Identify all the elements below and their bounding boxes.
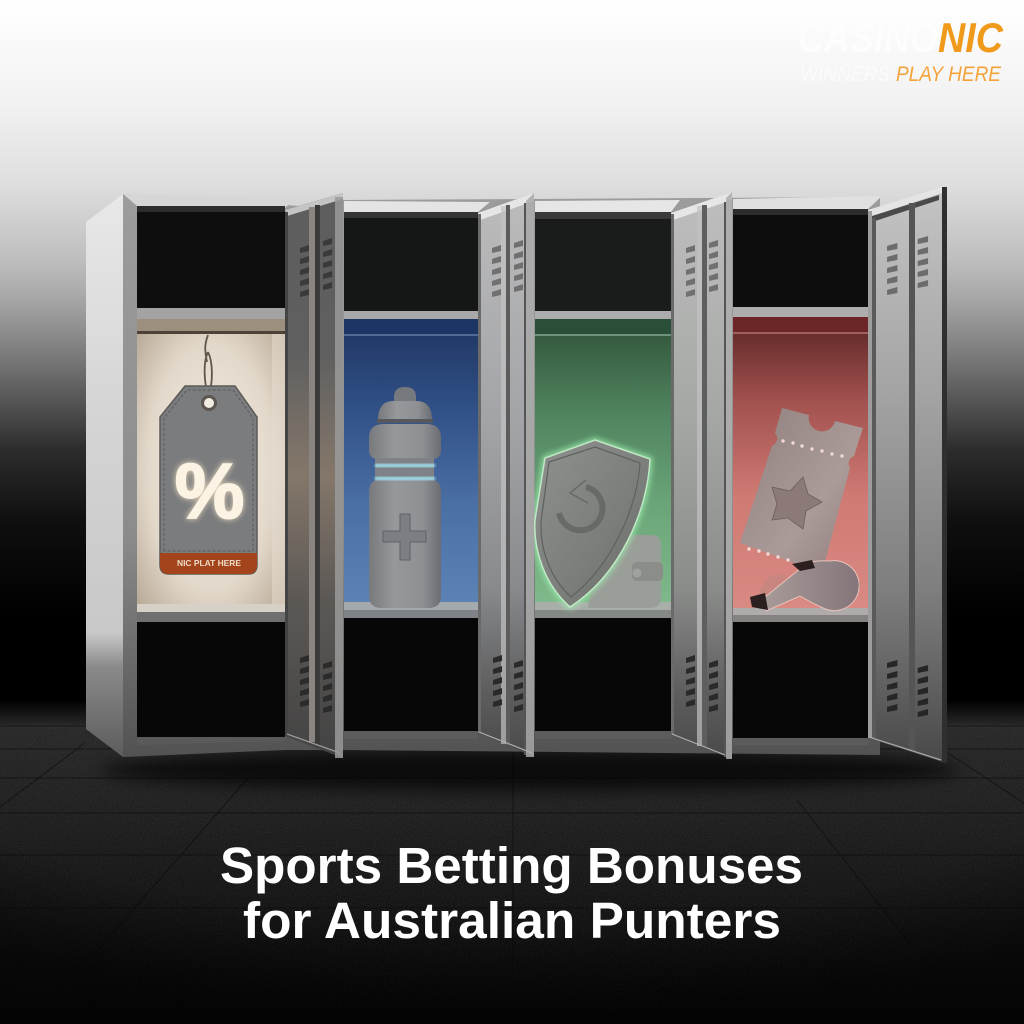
icon: ticket with star	[740, 408, 863, 573]
locker 4: ticket and whistle compartment	[733, 209, 868, 745]
icon: shield with refund arrow	[535, 440, 650, 607]
locker cabinet frame	[123, 194, 882, 757]
title	[220, 837, 803, 949]
title: for Australian Punters	[243, 892, 781, 949]
logo: Casino NIC: WINNERS	[800, 63, 890, 86]
icon: wallet	[588, 535, 663, 608]
door 4	[868, 187, 947, 763]
icon: sports bottle with cross	[369, 387, 441, 608]
icon: percent hang tag: NIC PLAT HERE	[177, 558, 241, 568]
floor with tile lines	[0, 700, 1024, 1024]
locker 1: discount tag compartment	[137, 206, 285, 745]
icon: percent hang tag	[160, 335, 257, 574]
title: Sports Betting Bonuses	[220, 837, 803, 894]
logo: Casino NIC	[798, 14, 1004, 86]
logo: Casino NIC: NIC	[938, 14, 1004, 61]
logo: Casino NIC: CASINO	[798, 14, 938, 61]
door 1	[285, 193, 343, 758]
icon: percent hang tag: %	[175, 447, 244, 535]
door 3	[671, 192, 732, 759]
icon: percent hang tag: %	[175, 447, 244, 535]
door 2	[478, 193, 534, 757]
locker side panel	[86, 194, 123, 757]
locker 2: water bottle compartment	[344, 212, 478, 739]
logo: Casino NIC: PLAY HERE	[896, 63, 1002, 86]
locker 3: shield and wallet compartment	[535, 212, 671, 739]
icon: whistle	[750, 560, 859, 611]
